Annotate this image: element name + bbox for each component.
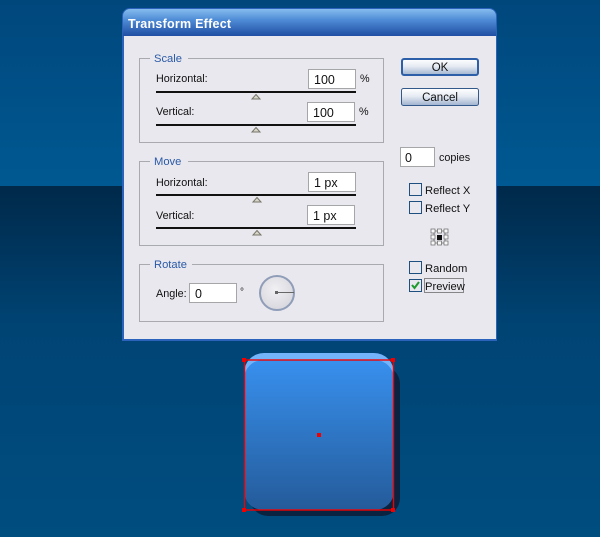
background: upper wall xyxy=(0,0,600,186)
square body xyxy=(244,360,394,510)
panel: move xyxy=(140,155,384,246)
title bar xyxy=(123,9,496,36)
copies field: 0 xyxy=(405,151,412,165)
panel: rotate: Rotate xyxy=(154,259,187,271)
title text: Transform Effect xyxy=(128,17,232,31)
square top highlight xyxy=(244,353,394,473)
rotation dial xyxy=(260,276,294,310)
panel: move: Move xyxy=(154,156,181,168)
panel: rotate: ° xyxy=(240,287,244,298)
panel: scale: Horizontal: xyxy=(156,73,208,85)
panel: scale: % xyxy=(360,73,370,85)
checkbox: Random: Random xyxy=(425,263,467,275)
panel: scale: Scale xyxy=(154,53,182,65)
panel: rotate xyxy=(140,258,384,322)
OK button: OK xyxy=(432,62,449,74)
background: lower floor xyxy=(0,186,600,537)
OK button xyxy=(402,59,478,75)
dialog window xyxy=(122,8,497,341)
panel: move: 1 px xyxy=(314,176,338,190)
panel: scale: % xyxy=(359,106,369,118)
copies field xyxy=(400,148,471,166)
dialog frame xyxy=(122,8,497,341)
copies field: copies xyxy=(439,152,471,164)
square shadow xyxy=(250,366,400,516)
panel: move: Vertical: xyxy=(156,210,194,222)
Cancel button xyxy=(402,88,478,106)
checkbox: Reflect Y xyxy=(410,202,471,215)
panel: rotate: Angle: xyxy=(156,288,187,300)
panel: scale: 100 xyxy=(313,106,334,120)
panel: move: 1 px xyxy=(313,209,337,223)
checkbox: Preview checked: Preview xyxy=(425,281,466,293)
panel: scale: 100 xyxy=(314,73,335,87)
checkbox: Reflect X: Reflect X xyxy=(425,185,471,197)
checkbox: Preview checked xyxy=(410,278,466,293)
rounded square artwork xyxy=(242,353,400,516)
panel: scale: Vertical: xyxy=(156,106,194,118)
checkbox: Reflect Y: Reflect Y xyxy=(425,203,471,215)
checkbox: Random xyxy=(410,262,467,275)
panel: scale xyxy=(140,52,384,142)
checkbox: Reflect X xyxy=(410,184,471,197)
panel: rotate: 0 xyxy=(195,287,202,301)
Cancel button: Cancel xyxy=(422,92,458,104)
dialog body xyxy=(124,36,496,339)
panel: move: Horizontal: xyxy=(156,177,208,189)
icon: reference point locator xyxy=(431,229,448,245)
red selection box xyxy=(242,358,395,512)
